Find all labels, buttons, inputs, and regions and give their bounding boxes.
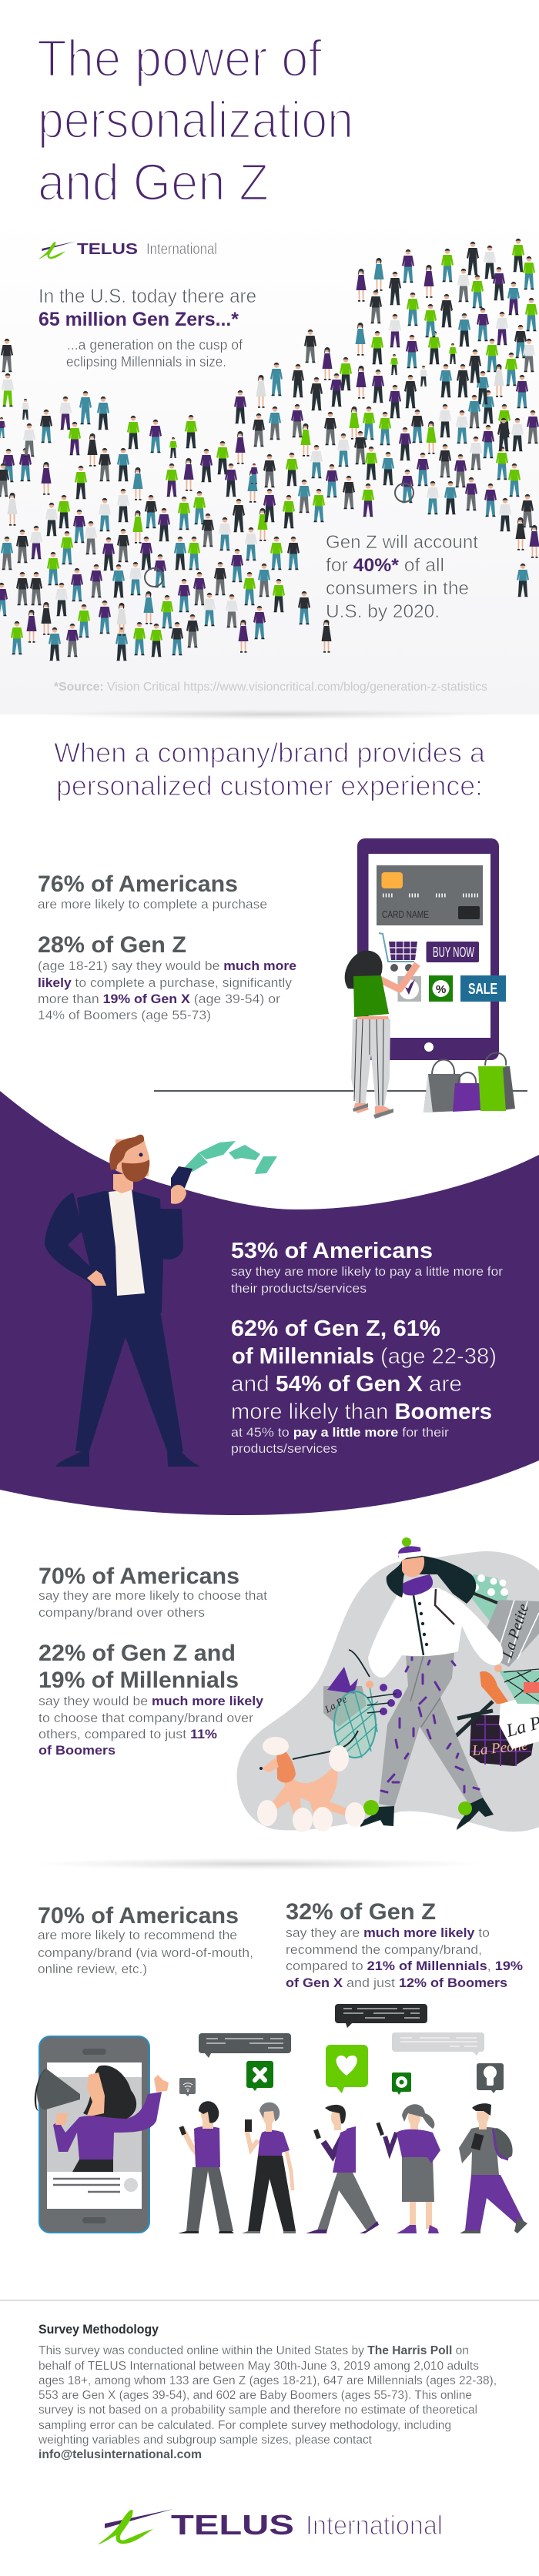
icon: light bulb bbox=[477, 2063, 504, 2093]
person 5 bbox=[459, 2103, 527, 2233]
panel: hero background bbox=[0, 0, 539, 714]
text: 22% of Gen Z and 19% of Millennials: of Boomers bbox=[38, 1743, 116, 1758]
text: 28% of Gen Z bbox=[38, 932, 296, 1022]
illustration: shopping on a phone bbox=[345, 838, 515, 1119]
logo: TELUS International top: International bbox=[146, 241, 217, 258]
button: buy now: BUY NOW bbox=[433, 945, 474, 960]
face bbox=[402, 1557, 424, 1577]
bag: La Petite bbox=[451, 1574, 539, 1667]
text: 70% choose brand: company/brand over others bbox=[38, 1605, 205, 1620]
speech bubble: light bbox=[392, 2032, 484, 2056]
icon: gear bbox=[392, 2073, 411, 2095]
text: methodology: info@telusinternational.com bbox=[38, 2448, 202, 2461]
text: 22% of Gen Z and 19% of Millennials: others, compared to just 11% bbox=[38, 1727, 217, 1741]
text: 22% of Gen Z and 19% of Millennials: 19% of Millennials bbox=[38, 1668, 239, 1693]
text: 76% of Americans: 76% of Americans bbox=[38, 871, 238, 897]
text: 70% recommend: are more likely to recommend the bbox=[38, 1928, 237, 1942]
illustration: money flying from wallet bbox=[183, 1141, 277, 1174]
text: Gen Z will account for 40%: U.S. by 2020. bbox=[326, 601, 440, 622]
title: The power of bbox=[37, 29, 322, 88]
text: 32% of Gen Z: say they are much more likely to bbox=[286, 1925, 490, 1940]
logo: TELUS International top bbox=[38, 241, 217, 259]
divider shadow bbox=[31, 1858, 485, 1870]
text: 62% of Gen Z: and 54% of Gen X are bbox=[231, 1372, 462, 1397]
icon: cross bbox=[246, 2061, 273, 2091]
logo: TELUS International bottom: International bbox=[306, 2511, 443, 2541]
text: 65 million Gen Zers: 65 million Gen Zers...* bbox=[38, 309, 239, 330]
poodle bbox=[257, 1731, 365, 1832]
scarf bbox=[403, 1574, 433, 1595]
person 4 bbox=[376, 2104, 440, 2233]
illustration: shopper walking dog bbox=[236, 1537, 539, 1832]
icon: heart bbox=[326, 2045, 368, 2093]
source note: *Source: Vision Critical https://www.visioncritical.com/blog/generation-z-statistics bbox=[54, 681, 487, 694]
text: 22% of Gen Z and 19% of Millennials: to choose that company/brand over bbox=[38, 1711, 253, 1725]
coat bbox=[368, 1588, 503, 1678]
person 1 bbox=[178, 2101, 234, 2233]
credit card: CARD NAME bbox=[382, 909, 429, 920]
text: 62% of Gen Z: more likely than Boomers bbox=[231, 1400, 492, 1424]
illustration: phone with megaphone woman bbox=[35, 2036, 169, 2233]
text: 62% of Gen Z: at 45% to pay a little more for their bbox=[231, 1425, 449, 1440]
badge: check bbox=[397, 976, 421, 1002]
text: 53% of Americans: 53% of Americans bbox=[231, 1239, 433, 1263]
title: and Gen Z bbox=[38, 153, 269, 212]
grey blob bbox=[236, 1551, 539, 1832]
text: Gen Z will account for 40%: Gen Z will account bbox=[326, 532, 478, 553]
icon: wifi bbox=[179, 2078, 196, 2096]
speech bubble: dark grey bbox=[199, 2033, 291, 2058]
text: 22% of Gen Z and 19% of Millennials bbox=[38, 1641, 264, 1758]
title bbox=[37, 29, 353, 212]
text: 65 million Gen Zers bbox=[38, 286, 256, 330]
crowd of people bbox=[0, 239, 539, 661]
pants bbox=[379, 1653, 484, 1807]
bag: La Petite: La Petite bbox=[499, 1601, 532, 1661]
text: 22% of Gen Z and 19% of Millennials: say they would be much more likely bbox=[38, 1694, 264, 1708]
text: methodology: This survey was conducted online within the United States by The Harris Poll on bbox=[38, 2344, 469, 2357]
text: cusp of eclipsing Millennials bbox=[66, 336, 243, 370]
text: 62% of Gen Z: products/services bbox=[231, 1441, 337, 1456]
boots bbox=[360, 1806, 394, 1827]
text: 53% of Americans bbox=[231, 1239, 503, 1296]
heading: survey methodology: Survey Methodology bbox=[38, 2323, 159, 2337]
text: 70% recommend bbox=[38, 1903, 253, 1976]
text: Gen Z will account for 40%: for 40%* of all bbox=[326, 555, 444, 576]
text: 70% choose brand: 70% of Americans bbox=[38, 1564, 239, 1589]
credit card bbox=[377, 865, 483, 925]
text: 70% recommend: online review, etc.) bbox=[38, 1962, 147, 1976]
divider shadow bbox=[38, 709, 500, 720]
phone bbox=[357, 838, 499, 1060]
text: 76% of Americans: are more likely to complete a purchase bbox=[38, 897, 267, 912]
text: cusp of eclipsing Millennials: ...a generation on the cusp of bbox=[67, 336, 243, 353]
text: 70% recommend: 70% of Americans bbox=[38, 1903, 239, 1929]
text: 70% choose brand bbox=[38, 1564, 267, 1620]
button: buy now bbox=[427, 942, 479, 962]
text: Gen Z will account for 40% bbox=[326, 532, 478, 622]
person 3 bbox=[306, 2105, 379, 2233]
bag: La Pet bbox=[499, 1669, 539, 1749]
left net bag: La Pe bbox=[322, 1693, 349, 1715]
text: 32% of Gen Z: 32% of Gen Z bbox=[286, 1899, 436, 1925]
text: 62% of Gen Z: 62% of Gen Z, 61% bbox=[231, 1316, 440, 1341]
text: 65 million Gen Zers: In the U.S. today there are bbox=[38, 286, 256, 307]
text: 70% choose brand: say they are more likely to choose that bbox=[38, 1588, 267, 1603]
text: 53% of Americans: their products/services bbox=[231, 1281, 367, 1296]
floor line bbox=[154, 1090, 527, 1092]
title: personalization bbox=[38, 91, 353, 149]
text: methodology: ages 18+, among whom 133 are Gen Z (ages 18-21), 647 are Millennials (ages 22-38), bbox=[38, 2374, 497, 2387]
heading: personalized customer experience: personalized customer experience: bbox=[56, 770, 483, 801]
text: 32% of Gen Z: of Gen X and just 12% of Boomers bbox=[286, 1975, 507, 1990]
badge: sale: SALE bbox=[468, 981, 497, 998]
person 2 bbox=[242, 2103, 296, 2233]
bag: basket bbox=[456, 1671, 534, 1766]
text: 62% of Gen Z bbox=[231, 1316, 497, 1456]
illustration: man in suit bbox=[45, 1135, 200, 1467]
text: 76% of Americans bbox=[38, 871, 267, 912]
text: 28% of Gen Z: 14% of Boomers (age 55-73) bbox=[38, 1008, 211, 1022]
heading: personalized customer experience: When a company/brand provides a bbox=[54, 737, 486, 768]
text: methodology: weighting variables and subgroup sample sizes, please contact bbox=[38, 2434, 373, 2447]
woman shopper bbox=[345, 951, 417, 1119]
text: methodology: sampling error can be calculated. For complete survey methodology, including bbox=[38, 2419, 451, 2432]
divider bbox=[0, 2300, 539, 2301]
text: 32% of Gen Z: recommend the company/brand, bbox=[286, 1942, 482, 1957]
badge: percent bbox=[429, 975, 453, 1002]
text: 32% of Gen Z bbox=[286, 1899, 523, 1990]
heading: personalized customer experience bbox=[54, 737, 486, 801]
text: methodology: 553 are Gen X (ages 39-54), and 602 are Baby Boomers (ages 55-73). This online bbox=[38, 2389, 472, 2402]
logo: TELUS International bottom: TELUS bbox=[171, 2509, 294, 2541]
badge: percent: % bbox=[436, 983, 446, 996]
bag: basket: La Peone bbox=[470, 1738, 528, 1759]
badge: sale bbox=[460, 975, 506, 1002]
logo: TELUS International bottom bbox=[98, 2509, 443, 2544]
text: 28% of Gen Z: likely to complete a purchase, significantly bbox=[38, 975, 293, 990]
text: 62% of Gen Z: of Millennials (age 22-38) bbox=[232, 1344, 497, 1369]
shopping bags bbox=[424, 1053, 515, 1112]
hair bbox=[387, 1555, 476, 1604]
text: 28% of Gen Z: 28% of Gen Z bbox=[38, 932, 186, 958]
hat bbox=[398, 1537, 421, 1559]
text: cusp of eclipsing Millennials: eclipsing Millennials in size. bbox=[66, 353, 226, 370]
cart bbox=[379, 933, 417, 972]
text: Gen Z will account for 40%: consumers in the bbox=[326, 578, 469, 599]
text: 28% of Gen Z: more than 19% of Gen X (age 39-54) or bbox=[38, 992, 280, 1006]
left net bag bbox=[322, 1650, 502, 1758]
panel: purple wave bbox=[0, 1091, 539, 1515]
logo: TELUS International top: TELUS bbox=[77, 241, 138, 258]
text: methodology: survey is not based on a probability sample and therefore no estimate of theoretical bbox=[38, 2404, 477, 2417]
text: 53% of Americans: say they are more likely to pay a little more for bbox=[231, 1264, 503, 1279]
text: 28% of Gen Z: (age 18-21) say they would be much more bbox=[38, 958, 296, 973]
text: methodology: behalf of TELUS International between May 30th-June 3, 2019 among 2,010 adults bbox=[38, 2360, 479, 2373]
text: 22% of Gen Z and 19% of Millennials: 22% of Gen Z and bbox=[38, 1641, 236, 1666]
text: 70% recommend: company/brand (via word-of-mouth, bbox=[38, 1945, 253, 1960]
text: 32% of Gen Z: compared to 21% of Millennials , 19% bbox=[286, 1959, 523, 1973]
text: methodology bbox=[38, 2344, 497, 2461]
speech bubble: black bbox=[335, 2004, 427, 2028]
